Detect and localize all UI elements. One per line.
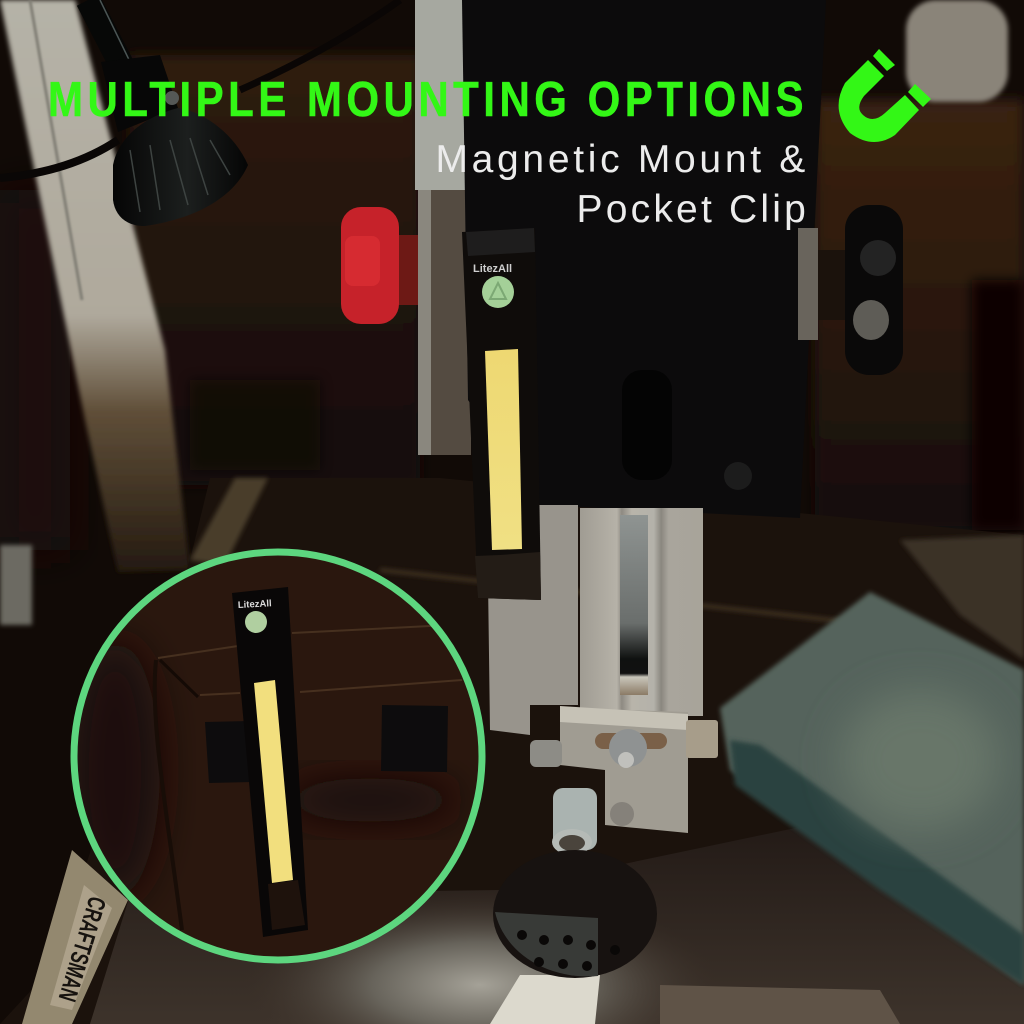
inset clipped light <box>232 587 308 937</box>
inset pocket fabric <box>78 625 463 930</box>
black band-saw housing <box>462 0 903 518</box>
light grey side plate <box>415 0 471 455</box>
cloth <box>720 535 1024 985</box>
white pipe <box>0 0 190 572</box>
mounted work light <box>462 228 541 600</box>
subtitle <box>435 138 809 231</box>
inset circle: pocket clip detail <box>70 548 486 964</box>
mounted work light: LitezAll <box>473 263 512 275</box>
subtitle: Magnetic Mount & <box>435 138 809 181</box>
inset velcro patches <box>205 705 448 783</box>
icon: magnet <box>839 49 931 142</box>
aluminium post and guide <box>487 505 718 855</box>
workbench surface <box>0 478 1024 1024</box>
red knob <box>341 207 425 324</box>
inset clipped light: LitezAll <box>238 598 272 611</box>
title: MULTIPLE MOUNTING OPTIONS <box>48 73 808 127</box>
subtitle: Pocket Clip <box>577 188 809 231</box>
gooseneck lamp <box>0 0 400 226</box>
perforated table insert <box>493 850 657 978</box>
